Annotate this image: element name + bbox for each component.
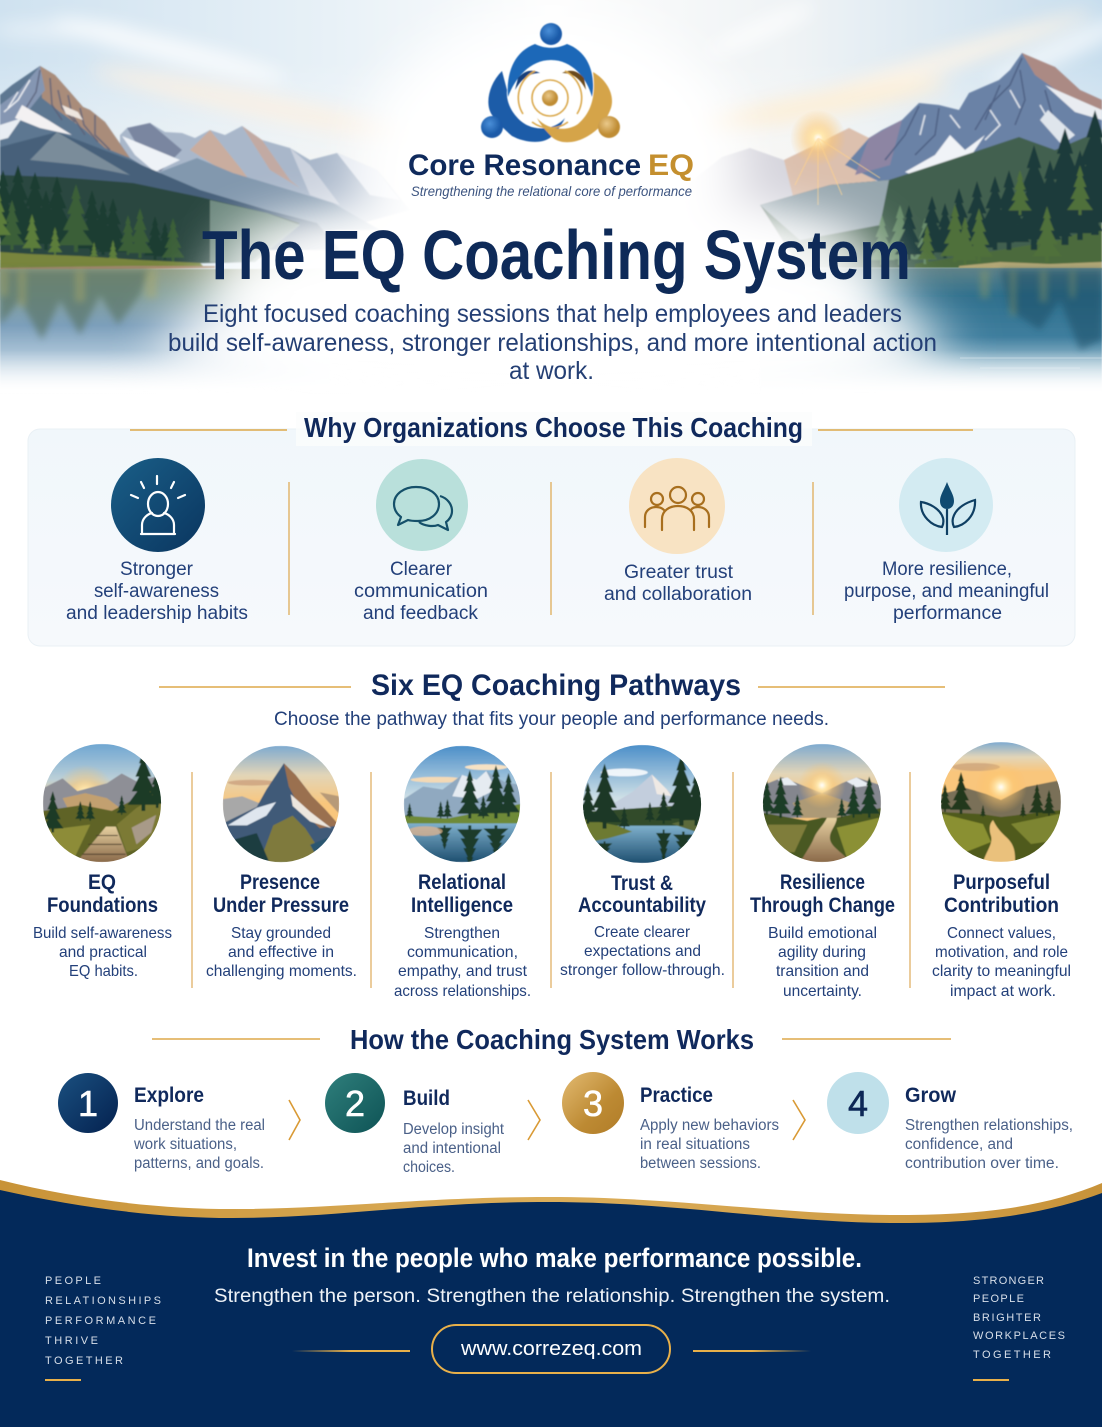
pathway: Relational Intelligence: [394, 746, 531, 1000]
description: and effective in: [228, 944, 334, 961]
description: [33, 925, 172, 980]
description: Connect values,: [947, 925, 1056, 942]
name: Foundations: [47, 894, 158, 917]
name: Resilience: [780, 871, 865, 894]
intro text: build self-awareness, stronger relationships, and more intentional action: [168, 329, 937, 357]
arrow: step 3 to 4: [793, 1100, 805, 1140]
sun and rays: [790, 110, 880, 205]
name: Trust &: [611, 872, 673, 895]
left main mountain: [0, 66, 150, 190]
pathway: Trust & Accountability: [560, 745, 725, 979]
step 1: explore: 1: [78, 1083, 98, 1124]
description: Strengthen: [424, 925, 500, 942]
step 1: explore: [58, 1073, 265, 1172]
step 2: build: Develop insight: [403, 1121, 505, 1138]
text: clearer communication: Clearer: [390, 559, 453, 580]
logo: [408, 23, 694, 199]
icon: group of people: [629, 458, 725, 554]
heading: how it works: How the Coaching System Works: [350, 1024, 754, 1055]
left word list: PEOPLE: [45, 1275, 101, 1287]
step 1: explore: Understand the real: [134, 1117, 265, 1134]
right main mountain: [845, 53, 1102, 190]
name: Purposeful: [953, 871, 1050, 894]
lake right: [760, 268, 1102, 393]
logo: EQ: [648, 149, 694, 182]
step 2: build: and intentional: [403, 1140, 501, 1157]
left word list: RELATIONSHIPS: [45, 1295, 161, 1307]
name: EQ: [88, 871, 116, 894]
text: more resilience: More resilience,: [882, 559, 1012, 580]
step 4: grow: [827, 1072, 1073, 1172]
description: uncertainty.: [783, 983, 862, 1000]
text: clearer communication: communication: [354, 581, 488, 602]
left forest hillside: [0, 175, 300, 268]
tagline: Strengthening the relational core of performance: [411, 183, 692, 199]
name: [944, 871, 1059, 917]
text: greater trust: and collaboration: [604, 584, 752, 605]
description: [560, 924, 725, 979]
panel: why organizations choose: [28, 412, 1075, 646]
footer headline: Invest in the people who make performance possible.: [247, 1243, 862, 1273]
description: impact at work.: [950, 983, 1056, 1000]
text: stronger self-awareness: and leadership habits: [66, 603, 248, 624]
description: challenging moments.: [206, 963, 357, 980]
description: and practical: [59, 944, 147, 961]
website button: www.correzeq.com: [460, 1338, 642, 1360]
description: transition and: [776, 963, 869, 980]
description: clarity to meaningful: [932, 963, 1071, 980]
footer band: [0, 1180, 1102, 1427]
icon: self-awareness person: [111, 458, 205, 552]
left word list: THRIVE: [45, 1335, 98, 1347]
step 2: build: choices.: [403, 1159, 455, 1176]
heading: why organizations: Why Organizations Choose This Coaching: [304, 412, 803, 443]
left distant range: [120, 123, 410, 240]
step 3: practice: in real situations: [640, 1136, 750, 1153]
step 4: grow: 4: [848, 1083, 868, 1124]
brand name: Core Resonance: [408, 149, 641, 182]
right word list: [973, 1275, 1065, 1381]
arrow: step 1 to 2: [289, 1100, 300, 1140]
text: stronger self-awareness: Stronger: [120, 559, 194, 580]
description: EQ habits.: [69, 963, 138, 980]
description: empathy, and trust: [398, 963, 528, 980]
left trees: [0, 165, 175, 260]
step 3: practice: Apply new behaviors: [640, 1117, 779, 1134]
name: Under Pressure: [213, 894, 349, 917]
right word list: STRONGER: [973, 1275, 1044, 1287]
description: across relationships.: [394, 983, 531, 1000]
description: communication,: [407, 944, 518, 961]
right word list: PEOPLE: [973, 1293, 1024, 1305]
text: more resilience: [844, 559, 1049, 624]
name: Through Change: [750, 894, 895, 917]
pathway: Resilience Through Change: [750, 744, 895, 1000]
step 4: grow: confidence, and: [905, 1136, 1013, 1153]
photo: mountain lake: [404, 746, 520, 866]
description: stronger follow-through.: [560, 962, 725, 979]
right word list: TOGETHER: [973, 1349, 1051, 1361]
step 2: build: [325, 1073, 505, 1176]
white centre glow: [0, 15, 1102, 424]
text: stronger self-awareness: self-awareness: [94, 581, 219, 602]
pathway: Purposeful Contribution: [932, 742, 1071, 1000]
step 1: explore: Explore: [134, 1084, 204, 1107]
text: more resilience: performance: [893, 603, 1002, 624]
right distant range: [680, 128, 890, 240]
right trees: [869, 205, 937, 265]
step 2: build: 2: [345, 1083, 365, 1124]
photo: mountain peak: [223, 746, 339, 862]
name: Accountability: [578, 894, 706, 917]
text: clearer communication: and feedback: [363, 603, 479, 624]
description: [206, 925, 357, 980]
step 2: build: Build: [403, 1087, 450, 1110]
icon: speech bubbles: [376, 459, 468, 551]
photo: forest lake: [582, 744, 702, 864]
name: [47, 871, 158, 917]
description: Build emotional: [768, 925, 877, 942]
text: stronger self-awareness: [66, 559, 248, 624]
description: [932, 925, 1071, 1000]
text: greater trust: Greater trust: [624, 562, 734, 583]
left word list: PERFORMANCE: [45, 1315, 156, 1327]
description: agility during: [778, 944, 866, 961]
description: Create clearer: [594, 924, 691, 941]
step 4: grow: Strengthen relationships,: [905, 1117, 1073, 1134]
description: expectations and: [584, 943, 701, 960]
name: Contribution: [944, 894, 1059, 917]
step 1: explore: patterns, and goals.: [134, 1155, 264, 1172]
description: [768, 925, 877, 1000]
icon: sprout: [899, 458, 993, 552]
website button: [292, 1325, 811, 1373]
photo: sunrise trail: [42, 744, 168, 862]
intro text: at work.: [509, 357, 594, 385]
name: Presence: [240, 871, 320, 894]
pathways subheading: Choose the pathway that fits your people and performance needs.: [274, 709, 829, 730]
name: Relational: [418, 871, 506, 894]
intro text: Eight focused coaching sessions that help employees and leaders: [203, 300, 902, 328]
description: Stay grounded: [231, 925, 331, 942]
footer tagline: Strengthen the person. Strengthen the relationship. Strengthen the system.: [214, 1285, 890, 1307]
step 3: practice: [562, 1072, 779, 1172]
right word list: WORKPLACES: [973, 1330, 1065, 1342]
step 3: practice: 3: [583, 1083, 603, 1124]
text: greater trust: [604, 562, 752, 605]
description: motivation, and role: [935, 944, 1068, 961]
step 3: practice: between sessions.: [640, 1155, 761, 1172]
title: The EQ Coaching System: [202, 216, 911, 294]
lake left: [0, 269, 330, 394]
step 1: explore: work situations,: [133, 1136, 237, 1153]
name: [578, 872, 706, 917]
right lower slope: [760, 130, 1102, 268]
intro text: [168, 300, 937, 385]
logo mark: three figures around concentric rings: [481, 23, 620, 142]
left word list: [45, 1275, 161, 1381]
step 4: grow: Grow: [905, 1084, 957, 1107]
left word list: TOGETHER: [45, 1355, 123, 1367]
description: Build self-awareness: [33, 925, 172, 942]
pathway: EQ Foundations: [33, 744, 172, 980]
name: [411, 871, 513, 917]
right word list: BRIGHTER: [973, 1312, 1041, 1324]
name: [750, 871, 895, 917]
description: [394, 925, 531, 1000]
heading: six pathways: Six EQ Coaching Pathways: [371, 669, 741, 702]
arrow: step 2 to 3: [528, 1100, 540, 1140]
text: more resilience: purpose, and meaningful: [844, 581, 1049, 602]
step 3: practice: Practice: [640, 1084, 713, 1107]
right ground: [915, 225, 1102, 268]
step 4: grow: contribution over time.: [905, 1155, 1059, 1172]
text: clearer communication: [354, 559, 488, 624]
gold wave: [0, 1180, 1102, 1223]
name: Intelligence: [411, 894, 513, 917]
hero landscape: sky, mountains, forest and lake: [0, 0, 1102, 424]
photo: sunlit stream: [758, 744, 881, 862]
name: [213, 871, 349, 917]
photo: golden valley: [938, 742, 1061, 862]
pathway: Presence Under Pressure: [206, 746, 357, 980]
